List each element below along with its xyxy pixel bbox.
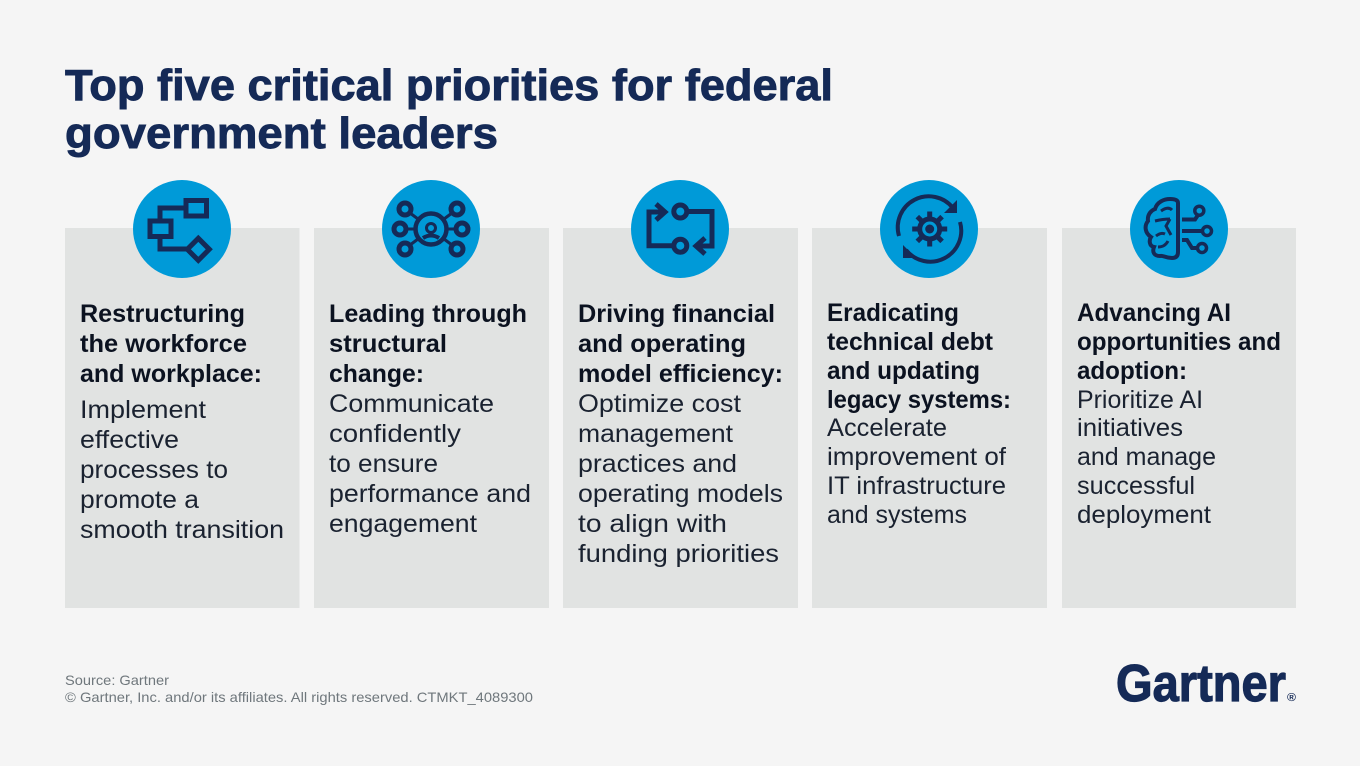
- text: implement effective processes: Implement: [80, 396, 206, 424]
- panel: eradicating technical debt: [812, 180, 1047, 608]
- heading: eradicating technical debt and updating legacy systems: [827, 299, 1011, 414]
- source and copyright: Source: Gartner: [65, 672, 169, 688]
- heading: advancing AI opportunities and adoption: adoption:: [1077, 357, 1187, 385]
- text: optimize cost management: practices and: [578, 450, 737, 478]
- title: Top five critical priorities for federal: [65, 61, 833, 110]
- text: communicate confidently: performance and: [329, 480, 531, 508]
- text: communicate confidently: confidently: [329, 420, 462, 448]
- heading: advancing AI opportunities and adoption: Advancing AI: [1077, 299, 1231, 327]
- heading: advancing AI opportunities and adoption: opportunities and: [1077, 328, 1281, 356]
- heading: eradicating technical debt and updating legacy systems: Eradicating: [827, 299, 959, 327]
- heading: restructuring the workforce and workplace: and workplace:: [80, 360, 262, 388]
- heading: restructuring the workforce and workplace: [80, 300, 262, 388]
- text: implement effective processes: smooth transition: [80, 516, 284, 544]
- panel: driving financial and operating model efficiency: [563, 180, 798, 608]
- heading: eradicating technical debt and updating legacy systems: legacy systems:: [827, 386, 1011, 414]
- text: optimize cost management: to align with: [578, 510, 727, 538]
- heading: restructuring the workforce and workplace: the workforce: [80, 330, 247, 358]
- text: accelerate improvement: improvement of: [827, 443, 1006, 471]
- panel: leading through structural change: [314, 180, 549, 608]
- text: implement effective processes: processes to: [80, 456, 228, 484]
- heading: driving financial and operating model efficiency: and operating: [578, 330, 746, 358]
- text: accelerate improvement: IT infrastructure: [827, 472, 1006, 500]
- panel: restructuring the workforce: [65, 180, 300, 608]
- text: optimize cost management: Optimize cost: [578, 390, 741, 418]
- heading: driving financial and operating model efficiency: [578, 300, 783, 388]
- text: optimize cost management: funding priorities: [578, 540, 779, 568]
- text: accelerate improvement: and systems: [827, 501, 967, 529]
- text: implement effective processes: [80, 396, 284, 544]
- text: prioritize AI initiatives: Prioritize AI: [1077, 386, 1203, 414]
- panel: advancing AI opportunities: [1062, 180, 1296, 608]
- text: prioritize AI initiatives: and manage: [1077, 443, 1216, 471]
- icon: gear with cycle arrows: [880, 180, 978, 278]
- text: optimize cost management: management: [578, 420, 733, 448]
- heading: leading through structural change: Leading through: [329, 300, 527, 328]
- text: communicate confidently: Communicate: [329, 390, 494, 418]
- heading: leading through structural change: structural: [329, 330, 447, 358]
- text: communicate confidently: engagement: [329, 510, 477, 538]
- heading: driving financial and operating model efficiency: Driving financial: [578, 300, 775, 328]
- title: government leaders: [65, 109, 498, 158]
- text: implement effective processes: effective: [80, 426, 179, 454]
- heading: eradicating technical debt and updating legacy systems: and updating: [827, 357, 980, 385]
- title: [65, 61, 833, 158]
- text: communicate confidently: [329, 390, 531, 538]
- logo: Gartner: Gartner: [1116, 655, 1286, 713]
- text: implement effective processes: promote a: [80, 486, 199, 514]
- text: communicate confidently: to ensure: [329, 450, 438, 478]
- text: prioritize AI initiatives: initiatives: [1077, 414, 1183, 442]
- heading: leading through structural change: change:: [329, 360, 424, 388]
- heading: leading through structural change: [329, 300, 527, 388]
- icon: process flowchart: [133, 180, 231, 278]
- text: prioritize AI initiatives: successful: [1077, 472, 1195, 500]
- text: optimize cost management: operating models: [578, 480, 783, 508]
- text: prioritize AI initiatives: deployment: [1077, 501, 1211, 529]
- heading: driving financial and operating model efficiency: model efficiency:: [578, 360, 783, 388]
- heading: eradicating technical debt and updating legacy systems: technical debt: [827, 328, 994, 356]
- heading: advancing AI opportunities and adoption: [1077, 299, 1281, 385]
- logo: Gartner: ®: [1287, 692, 1296, 704]
- text: accelerate improvement: [827, 414, 1006, 529]
- text: prioritize AI initiatives: [1077, 386, 1216, 529]
- icon: loop arrows with nodes: [631, 180, 729, 278]
- source and copyright: [65, 672, 533, 705]
- icon: AI brain with circuits: [1130, 180, 1228, 278]
- text: optimize cost management: [578, 390, 783, 568]
- source and copyright: © Gartner, Inc. and/or its affiliates. All rights reserved. CTMKT_4089300: [65, 689, 533, 705]
- text: accelerate improvement: Accelerate: [827, 414, 947, 442]
- heading: restructuring the workforce and workplace: Restructuring: [80, 300, 245, 328]
- icon: connected person network: [382, 180, 480, 278]
